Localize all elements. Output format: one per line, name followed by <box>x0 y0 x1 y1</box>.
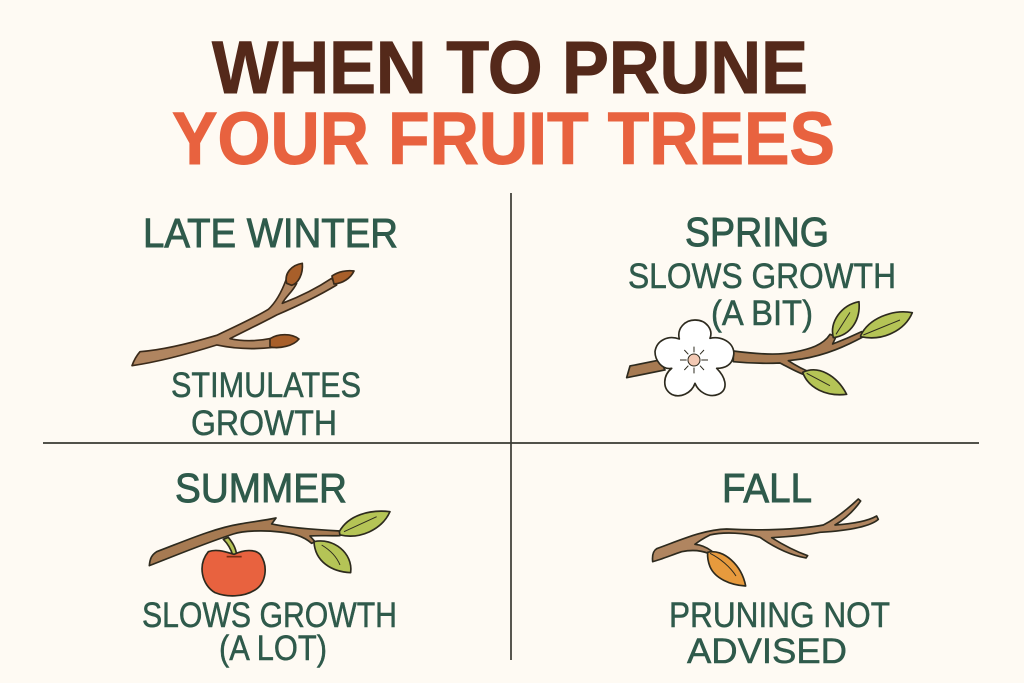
icon: fall twig with orange leaf <box>652 499 878 586</box>
text: slows growth a lot: SLOWS GROWTH <box>142 596 397 635</box>
text: stimulates growth: STIMULATES <box>171 366 361 405</box>
heading: summer: SUMMER <box>175 465 347 511</box>
icon: bare twig with buds <box>132 263 354 366</box>
text: slows growth a lot: (A LOT) <box>219 629 327 668</box>
panel: spring <box>627 209 912 396</box>
title: WHEN TO PRUNE <box>212 26 808 109</box>
panel: fall <box>652 465 890 671</box>
heading: late winter: LATE WINTER <box>143 210 398 256</box>
text: pruning not advised: PRUNING NOT <box>669 596 890 635</box>
title: YOUR FRUIT TREES <box>172 97 835 180</box>
text: pruning not advised: ADVISED <box>687 632 847 671</box>
text: slows growth a lot <box>142 596 397 668</box>
icon: blossom branch with leaves <box>627 302 912 396</box>
panel: summer <box>142 465 397 668</box>
icon: fruiting branch with apple <box>149 511 390 596</box>
title <box>172 26 835 180</box>
panel: late winter <box>132 210 398 443</box>
text: slows growth a bit: (A BIT) <box>711 294 813 333</box>
heading: fall: FALL <box>722 465 812 511</box>
heading: spring: SPRING <box>685 209 829 255</box>
text: slows growth a bit: SLOWS GROWTH <box>628 257 896 296</box>
text: slows growth a bit <box>628 257 896 333</box>
text: stimulates growth <box>171 366 361 443</box>
text: pruning not advised <box>669 596 890 671</box>
text: stimulates growth: GROWTH <box>191 404 337 443</box>
